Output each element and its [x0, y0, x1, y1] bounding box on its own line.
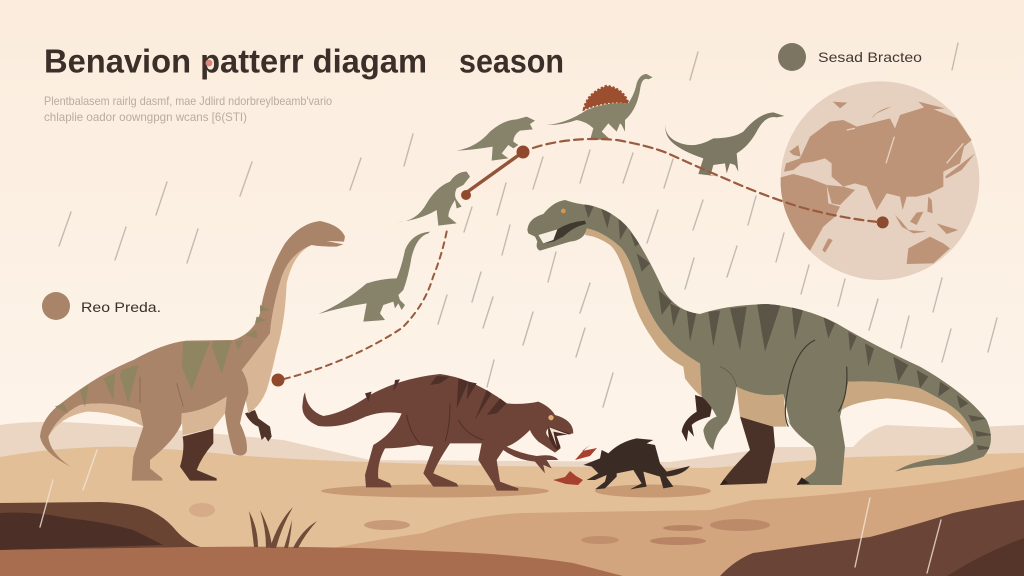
- far foreleg: [682, 395, 713, 442]
- ground: desert landscape: [0, 422, 1024, 576]
- body: [40, 221, 345, 481]
- belly and tail underside: [737, 381, 975, 443]
- small dinosaur 5: [665, 112, 784, 177]
- dorsal sail: [584, 86, 628, 109]
- back stripes: [583, 202, 995, 450]
- migration route: [284, 139, 878, 379]
- leg creases: [785, 340, 847, 427]
- t-rex eye and teeth: [548, 415, 554, 420]
- route waypoint dots: [272, 146, 530, 386]
- far hind leg: [720, 417, 775, 485]
- far forelimb: [245, 410, 272, 442]
- icon: grass tuft: [249, 507, 317, 548]
- red scraps: [553, 445, 597, 485]
- title: Benavion patterr diagam: [44, 42, 427, 80]
- small dark creature: [583, 438, 690, 489]
- small dinosaur 4 with sail: [547, 74, 653, 140]
- legend: left: [42, 292, 161, 320]
- big sauropod: [527, 200, 995, 485]
- body: [527, 200, 991, 485]
- small dinosaur 1: [318, 232, 430, 322]
- eye: [561, 209, 566, 213]
- t-rex: [302, 374, 573, 491]
- globe sea details: [847, 128, 963, 163]
- back leg: [180, 428, 217, 481]
- t-rex creases: [407, 403, 483, 443]
- legend: top right: Sesad Bracteo: [818, 49, 922, 65]
- subtitle text: chlaplie oador oowngpgn wcans [6(STI): [44, 110, 247, 124]
- legend: left: Reo Preda.: [81, 299, 161, 315]
- claws: [720, 477, 810, 485]
- neck underside: [585, 228, 702, 397]
- creases: [140, 377, 183, 407]
- legend: top right: [778, 43, 922, 71]
- small dinosaur 3: [457, 117, 535, 161]
- rain streaks: [59, 43, 997, 407]
- subtitle text: [44, 94, 332, 124]
- subtitle text: Plentbalasem rairlg dasmf, mae Jdlird ndorbreylbeamb'vario: [44, 94, 332, 108]
- title smudge: [206, 60, 212, 66]
- t-rex stripes: [365, 376, 507, 420]
- neck and chest underside: [240, 245, 312, 413]
- globe: [781, 81, 979, 280]
- mouth and teeth: [538, 221, 586, 243]
- stripes: [55, 305, 270, 413]
- tail and belly underside: [48, 397, 227, 437]
- globe continents: [781, 102, 975, 264]
- left sauropod: [40, 221, 345, 481]
- ground rain streaks: [40, 450, 941, 573]
- title: season: [459, 42, 564, 80]
- globe route dot: [877, 216, 889, 228]
- small dinosaur 2: [397, 172, 470, 226]
